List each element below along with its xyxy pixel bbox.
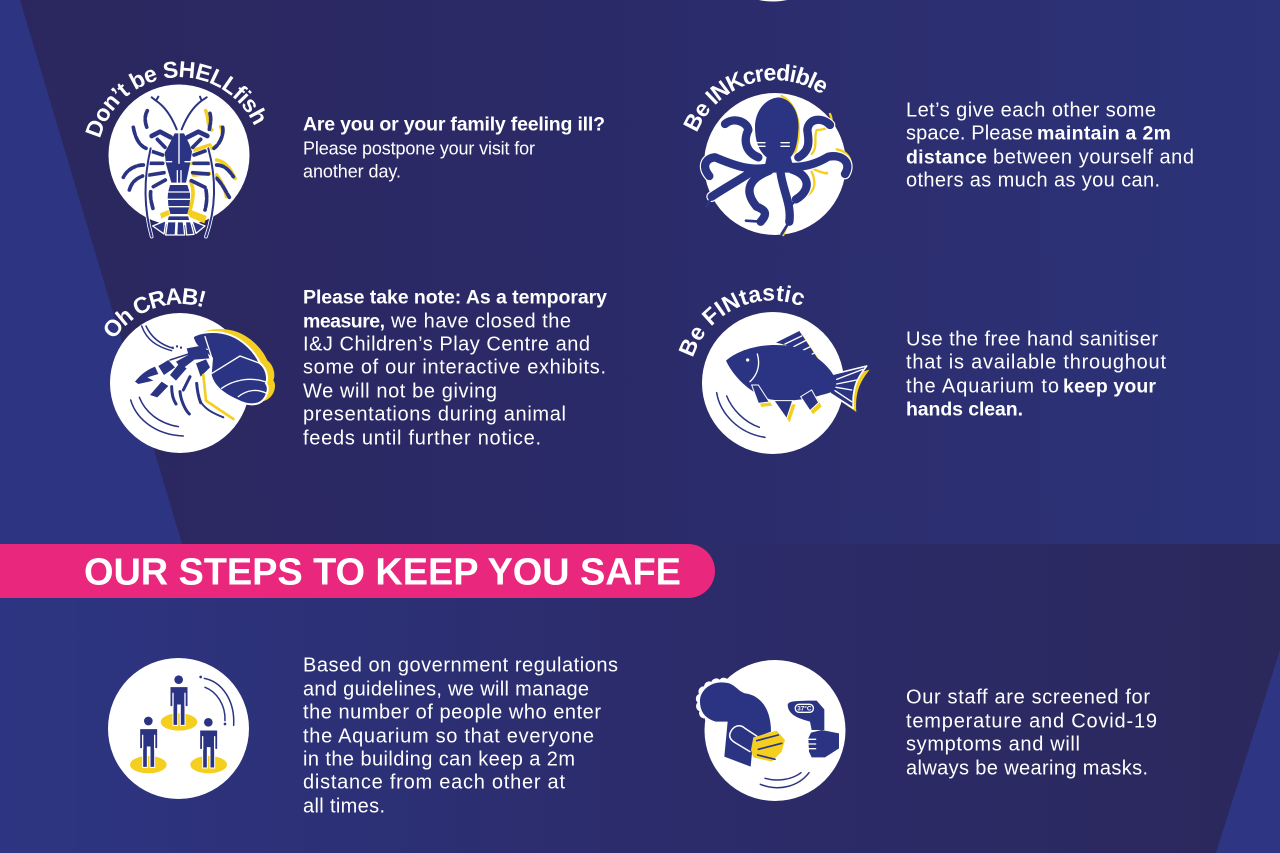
hair and head [700, 682, 771, 767]
panel: Be FINtastic [678, 285, 870, 454]
text: manage visitors: in the building can keep a 2m [303, 749, 575, 771]
icon: distanced people [108, 658, 249, 799]
text: keep 2m distance: maintain a 2m [1037, 123, 1171, 145]
text: hand sanitiser: hands clean. [906, 399, 1023, 421]
text: staff screening: always be wearing masks. [906, 758, 1148, 780]
text: are you feeling ill [303, 114, 605, 182]
text: manage visitors: and guidelines, we will manage [303, 679, 589, 701]
icon: lobster [108, 84, 250, 237]
icon: hermit crab [110, 313, 275, 453]
fish body [726, 345, 835, 401]
text: staff screening: symptoms and will [906, 734, 1080, 756]
panel: Oh CRAB! [104, 288, 275, 453]
person top [170, 675, 188, 725]
lower fins [752, 385, 819, 419]
octopus body [705, 97, 847, 234]
text: are you feeling ill: another day. [303, 162, 401, 182]
hair outline bumps [701, 683, 733, 718]
gill and eye [750, 354, 759, 382]
thermometer [788, 701, 824, 730]
text: temporary measure: feeds until further notice. [303, 428, 541, 450]
legs [152, 132, 207, 137]
text: temporary measure: I&J Children’s Play Centre and [303, 334, 590, 356]
motion lines [760, 773, 809, 788]
hand [808, 730, 839, 757]
curved label: Be FINtastic [678, 285, 804, 357]
top circle remnant [754, 0, 792, 2]
curved label: Be INKcredible [683, 64, 826, 132]
text: staff screening: temperature and Covid-19 [906, 711, 1157, 733]
person left [140, 717, 158, 767]
icon: screened staff with mask: 37°C [797, 705, 812, 713]
text: manage visitors: the Aquarium so that everyone [303, 726, 594, 748]
background: right wedge [1216, 650, 1280, 853]
text: hand sanitiser: that is available throughout [906, 352, 1166, 374]
motion lines [131, 397, 183, 436]
text: keep 2m distance: others as much as you can. [906, 170, 1160, 192]
antennae [152, 97, 207, 129]
motion lines [717, 393, 765, 437]
text: keep 2m distance: between yourself and [993, 147, 1194, 169]
dorsal fin [776, 331, 823, 366]
tail [830, 366, 867, 408]
eyes [757, 143, 789, 146]
text: keep 2m distance: Let’s give each other some [906, 100, 1156, 122]
curved label: Oh CRAB! [104, 288, 206, 336]
carapace [165, 133, 192, 183]
text: manage visitors: distance from each other at [303, 772, 565, 794]
yellow mask [751, 731, 785, 762]
icon: screened staff with mask [700, 660, 846, 801]
curved label: Don’t be SHELLfish [85, 61, 265, 138]
text: hand sanitiser: the Aquarium to [906, 376, 1059, 398]
tail fan [153, 216, 205, 235]
text: keep 2m distance: distance [906, 147, 987, 169]
ear and strap [730, 726, 757, 752]
background: lower section [0, 544, 1280, 853]
background: left wedge [0, 0, 182, 544]
yellow floor spots [130, 713, 227, 773]
text: manage visitors: Based on government regulations [303, 655, 618, 677]
text: temporary measure: we have closed the [390, 311, 571, 333]
text: keep 2m distance: space. Please [906, 123, 1033, 145]
panel: Be INKcredible [683, 64, 853, 236]
motion lines [204, 678, 234, 725]
icon: octopus [704, 93, 851, 235]
tail [168, 185, 190, 214]
heading banner: our steps [0, 544, 715, 598]
claw legs [135, 354, 210, 397]
text: temporary measure [303, 287, 607, 450]
text: temporary measure: Please take note: As a temporary [303, 287, 607, 309]
side whips [146, 148, 214, 237]
text: temporary measure: presentations during animal [303, 404, 566, 426]
text: staff screening [906, 687, 1157, 780]
text: manage visitors: all times. [303, 796, 385, 818]
yellow shadow [782, 96, 851, 235]
heading banner: our steps: OUR STEPS TO KEEP YOU SAFE [84, 552, 681, 594]
person right [200, 718, 218, 768]
panel: Don't be SHELLfish [85, 61, 265, 238]
text: hand sanitiser: keep your [1063, 376, 1156, 398]
text: hand sanitiser: Use the free hand sanitiser [906, 329, 1158, 351]
text: hand sanitiser [906, 329, 1166, 421]
text: keep 2m distance [906, 100, 1194, 192]
text: temporary measure: We will not be giving [303, 381, 497, 403]
white keyline [705, 120, 847, 222]
head stalk [187, 345, 209, 360]
yellow shadow [755, 335, 870, 422]
background: upper section [0, 0, 1280, 544]
text: manage visitors [303, 655, 618, 818]
text: manage visitors: the number of people who enter [303, 702, 601, 724]
text: temporary measure: measure, [303, 311, 385, 333]
yellow shadow [160, 111, 235, 223]
text: staff screening: Our staff are screened for [906, 687, 1150, 709]
shell shadow [200, 329, 275, 401]
shell [193, 332, 268, 404]
icon: fish [702, 312, 870, 454]
text: temporary measure: some of our interactive exhibits. [303, 357, 606, 379]
text: are you feeling ill: Please postpone your visit for [303, 139, 535, 159]
text: are you feeling ill: Are you or your family feeling ill? [303, 114, 605, 136]
